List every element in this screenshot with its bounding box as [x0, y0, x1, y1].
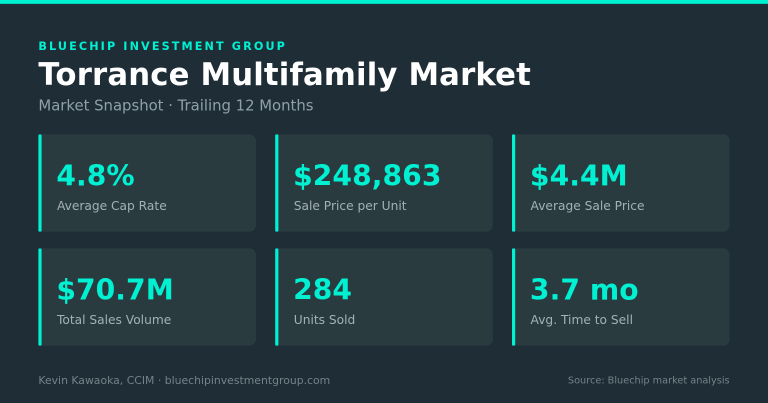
panel: average sale price: Average Sale Price	[531, 198, 644, 213]
footer: source note: Source: Bluechip market analysis	[568, 374, 730, 386]
panel: sale price per unit	[275, 134, 493, 232]
panel: average time to sell	[512, 248, 730, 346]
panel: sale price per unit: Sale Price per Unit	[294, 198, 407, 213]
panel: sale price per unit: $248,863	[293, 160, 441, 193]
panel: average cap rate: 4.8%	[56, 160, 135, 193]
panel: total sales volume: $70.7M	[56, 274, 174, 307]
subtitle: Market Snapshot · Trailing 12 Months	[38, 97, 313, 114]
title: Torrance Multifamily Market	[38, 57, 531, 93]
panel: total sales volume: Total Sales Volume	[57, 312, 171, 327]
eyebrow: organisation name: BLUECHIP INVESTMENT GROUP	[38, 40, 287, 53]
panel: average sale price	[512, 134, 730, 232]
panel: average sale price: $4.4M	[530, 160, 628, 193]
panel: average cap rate: Average Cap Rate	[57, 198, 167, 213]
footer: author and website: Kevin Kawaoka, CCIM · bluechipinvestmentgroup.com	[38, 373, 330, 386]
panel: units sold: Units Sold	[294, 312, 355, 327]
panel: average cap rate	[38, 134, 256, 232]
panel: average time to sell: Avg. Time to Sell	[531, 312, 633, 327]
panel: average time to sell: 3.7 mo	[530, 274, 639, 307]
top accent bar	[0, 0, 768, 4]
panel: units sold	[275, 248, 493, 346]
panel: units sold: 284	[293, 274, 352, 307]
panel: total sales volume	[38, 248, 256, 346]
